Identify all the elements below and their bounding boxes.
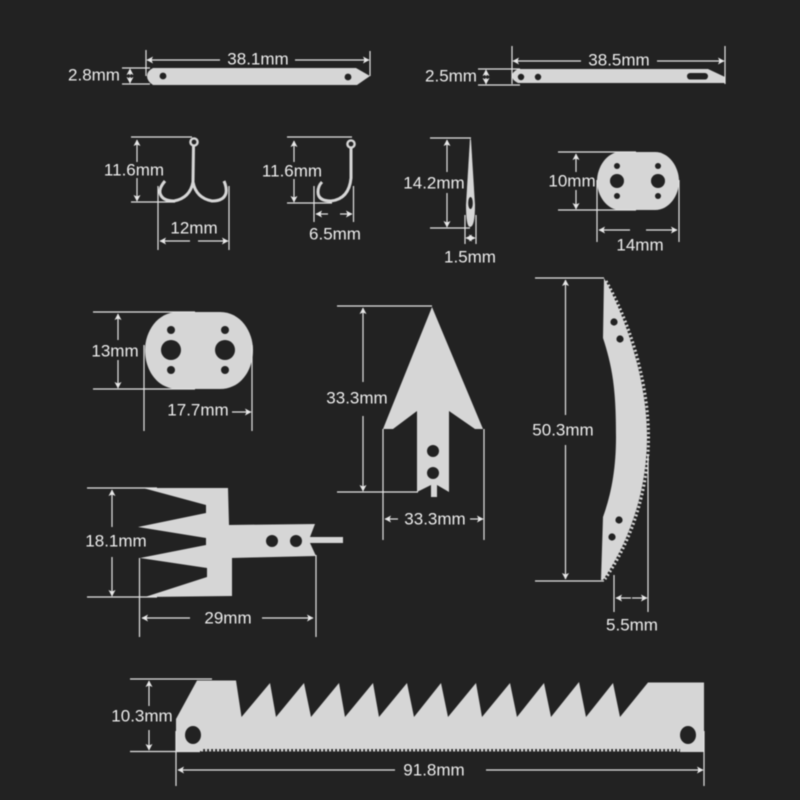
dimension: height: 33.3mm bbox=[326, 388, 388, 408]
dimension: width bbox=[383, 429, 484, 540]
hook shape bbox=[318, 140, 355, 201]
item: comb blade bbox=[85, 488, 343, 637]
curved blade teeth bbox=[605, 281, 648, 579]
dimension: width: 2.5mm bbox=[425, 66, 477, 86]
dimension: width: 12mm bbox=[170, 218, 218, 238]
saw blade shape bbox=[176, 680, 704, 752]
item: double hook bbox=[104, 137, 229, 250]
dimension: height bbox=[532, 278, 604, 581]
saw blade fine teeth bbox=[201, 748, 680, 752]
dimension: height: 11.6mm bbox=[104, 160, 164, 180]
dimension: width bbox=[144, 345, 252, 431]
dimension: height bbox=[91, 312, 195, 389]
item: needle 38.1mm bbox=[68, 50, 370, 85]
dimension: height: 10mm bbox=[548, 172, 596, 190]
dimension: width: 14mm bbox=[616, 236, 664, 254]
needle holes bbox=[160, 73, 351, 80]
dimension: width: 29mm bbox=[204, 608, 252, 628]
arrowhead shape bbox=[383, 307, 483, 497]
dimension: height: 13mm bbox=[91, 342, 139, 360]
dimension: length bbox=[512, 46, 725, 84]
dimension: width: 17.7mm bbox=[167, 400, 229, 420]
dimension: width: 33.3mm bbox=[404, 510, 466, 528]
dimension: width: 1.5mm bbox=[444, 248, 496, 266]
dimension: height bbox=[111, 679, 212, 752]
needle holes bbox=[518, 73, 708, 80]
dimension: length bbox=[146, 50, 370, 76]
comb shape bbox=[138, 488, 343, 597]
dimension: height: 14.2mm bbox=[403, 174, 465, 192]
comb holes bbox=[266, 535, 302, 547]
curved blade holes bbox=[608, 318, 624, 541]
disc holes bbox=[161, 326, 235, 374]
item: curved saw blade bbox=[532, 278, 658, 634]
curved blade shape bbox=[601, 278, 647, 580]
disc holes bbox=[610, 163, 665, 199]
item: sewing needle bbox=[403, 138, 496, 266]
arrowhead holes bbox=[427, 445, 439, 479]
dimension: length bbox=[176, 731, 704, 786]
saw blade holes bbox=[185, 726, 696, 744]
dimension: length: 38.5mm bbox=[588, 50, 650, 70]
dimension: width: 2.8mm bbox=[68, 66, 120, 84]
disc shape bbox=[597, 152, 679, 210]
hook shape bbox=[160, 138, 226, 201]
dimension: width bbox=[140, 555, 316, 637]
dimension: length: 38.1mm bbox=[227, 50, 289, 68]
dimension: width: 5.5mm bbox=[606, 616, 658, 634]
dimension: height bbox=[326, 306, 432, 492]
dimension: height: 50.3mm bbox=[532, 420, 594, 440]
item: needle 38.5mm bbox=[425, 46, 725, 86]
dimension: width bbox=[425, 66, 520, 86]
needle shape bbox=[466, 138, 475, 227]
needle blade bbox=[512, 69, 725, 83]
dimension: length: 91.8mm bbox=[403, 760, 465, 780]
needle blade bbox=[147, 68, 370, 85]
item: arrowhead blade bbox=[326, 306, 484, 540]
dimension: width bbox=[606, 455, 658, 634]
dimension: height: 11.6mm bbox=[262, 162, 322, 180]
item: single hook bbox=[262, 137, 361, 244]
item: saw blade bbox=[111, 679, 704, 786]
dimension: height: 18.1mm bbox=[85, 532, 147, 550]
needle eye bbox=[468, 197, 473, 209]
item: large disc bbox=[91, 312, 253, 431]
dimension: width bbox=[68, 66, 150, 84]
disc shape bbox=[145, 312, 253, 389]
dimension: width: 6.5mm bbox=[309, 224, 361, 244]
dimension: height bbox=[85, 488, 157, 597]
dimension: height: 10.3mm bbox=[111, 706, 173, 726]
item: small disc bbox=[548, 152, 679, 254]
